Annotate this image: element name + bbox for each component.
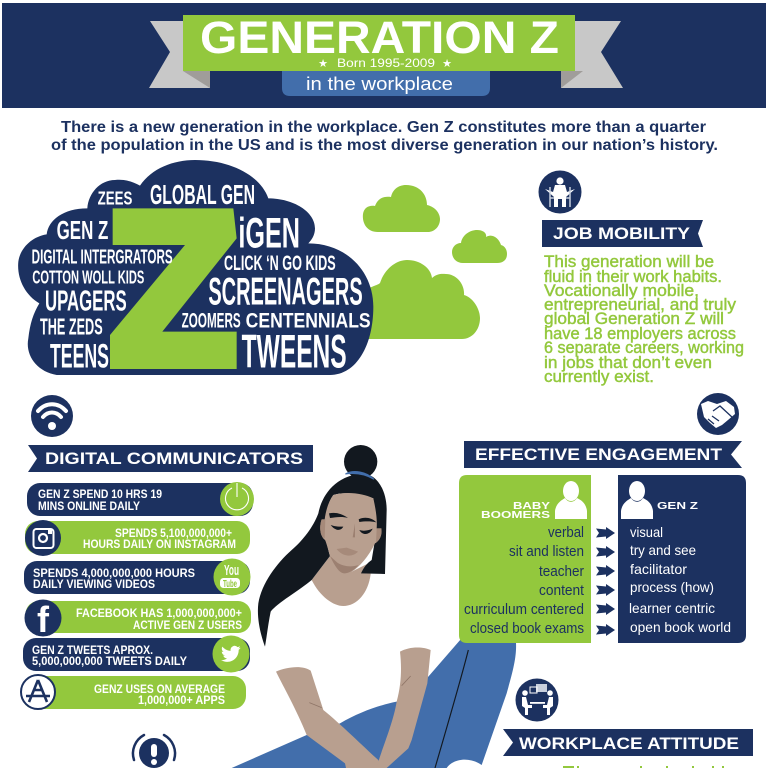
nickname words: GEN Z <box>57 215 108 245</box>
boomers list: closed book exams <box>470 621 584 637</box>
title banner: ★ <box>442 57 452 70</box>
job mobility text: currently exist. <box>544 368 654 386</box>
workplace attitude banner: WORKPLACE ATTITUDE <box>519 734 739 753</box>
boomers heading: BABY <box>513 500 550 512</box>
digital communicators banner <box>28 445 313 472</box>
nickname words: UPAGERS <box>45 286 127 318</box>
icon: youtube: You <box>224 563 239 579</box>
gen z heading: GEN Z <box>657 500 699 512</box>
job mobility banner: JOB MOBILITY <box>553 224 691 243</box>
icon: facebook <box>24 599 62 640</box>
icon: facebook: f <box>37 599 50 640</box>
hair band <box>345 472 374 479</box>
boomers list: verbal <box>548 525 584 541</box>
job mobility text: This generation will be <box>544 253 714 271</box>
job mobility text <box>544 253 744 386</box>
icon: workplace meeting <box>516 678 558 722</box>
subtitle tab: in the workplace <box>306 74 453 94</box>
gen z list <box>629 524 731 635</box>
subtitle tab <box>282 71 490 96</box>
icon: boomer person <box>555 481 587 519</box>
blue chair <box>232 639 516 768</box>
boomers heading: BOOMERS <box>481 509 550 521</box>
title banner: Born 1995-2009 <box>337 58 435 70</box>
icon: handshake <box>697 393 739 435</box>
hair <box>258 473 387 647</box>
stat pill: online hours: GEN Z SPEND 10 HRS 19 <box>38 489 162 501</box>
stat pill: video <box>24 558 250 596</box>
left ribbon tail <box>149 21 210 88</box>
job mobility text: global Generation Z will <box>544 310 724 328</box>
icon: job mobility person <box>538 170 582 214</box>
icon: app store <box>21 675 55 709</box>
job mobility banner <box>542 220 703 247</box>
boomers list: content <box>539 583 584 599</box>
nickname words: SCREENAGERS <box>208 270 363 313</box>
stat pill: apps: GENZ USES ON AVERAGE <box>94 684 225 696</box>
icon: wifi <box>31 395 73 437</box>
stat pill: twitter: 5,000,000,000 TWEETS DAILY <box>32 656 187 668</box>
arms <box>276 647 431 768</box>
stat pill: instagram: HOURS DAILY ON INSTAGRAM <box>83 539 236 551</box>
nickname words: iGEN <box>238 210 300 257</box>
stat pill: facebook <box>24 599 251 640</box>
comparison panel: baby boomers <box>459 475 591 643</box>
nickname words <box>32 179 371 379</box>
face <box>320 493 382 573</box>
stat pill: twitter <box>23 636 250 672</box>
comparison panel: gen z <box>618 475 746 643</box>
icon: power <box>220 482 254 516</box>
nickname words: GLOBAL GEN <box>150 179 255 210</box>
nickname words: CLICK ‘N GO KIDS <box>224 250 336 275</box>
icon: youtube: Tube <box>223 578 237 590</box>
gen z list: facilitator <box>630 561 687 577</box>
stat pill: video: DAILY VIEWING VIDEOS <box>33 579 155 591</box>
title banner: GENERATION Z <box>200 12 559 63</box>
digital communicators banner: DIGITAL COMMUNICATORS <box>45 449 303 468</box>
neck <box>312 556 371 606</box>
stat pill: apps <box>21 675 246 709</box>
effective engagement banner <box>464 441 742 468</box>
hair bun <box>344 445 377 478</box>
effective engagement banner: EFFECTIVE ENGAGEMENT <box>475 445 723 464</box>
nickname words: TWEENS <box>242 326 347 379</box>
job mobility text: in jobs that don’t even <box>544 354 712 372</box>
right ribbon tail <box>561 21 623 88</box>
title banner: ★ <box>318 57 328 70</box>
gen z list: learner centric <box>629 600 715 616</box>
job mobility text: Vocationally mobile, <box>544 282 699 300</box>
stat pill: apps: 1,000,000+ APPS <box>138 695 225 707</box>
big Z <box>110 208 237 369</box>
job mobility text: have 18 employers across <box>544 325 736 343</box>
boomers heading <box>481 500 550 521</box>
stat pill: facebook: ACTIVE GEN Z USERS <box>133 620 242 632</box>
job mobility text: 6 separate careers, working <box>544 339 744 357</box>
icon: alert <box>133 735 175 768</box>
stat pill: online hours <box>27 482 254 516</box>
intro text: of the population in the US and is the most diverse generation in our nation’s history. <box>51 137 718 154</box>
boomers list <box>464 525 584 637</box>
icon: youtube <box>214 558 250 596</box>
job mobility text: entrepreneurial, and truly <box>544 296 737 314</box>
nickname words: TEENS <box>50 338 109 376</box>
gen z list: try and see <box>630 542 696 558</box>
nickname words: CENTENNIALS <box>246 307 371 332</box>
gen z list: open book world <box>630 619 731 635</box>
nickname words: ZEES <box>98 187 132 208</box>
nickname words: COTTON WOLL KIDS <box>32 266 144 287</box>
arrows between columns <box>596 527 615 636</box>
workplace attitude banner <box>503 729 753 756</box>
icon: instagram <box>25 520 61 556</box>
stat pill: instagram <box>25 520 250 556</box>
nickname words: ZOOMERS <box>182 308 241 333</box>
intro text: There is a new generation in the workplace. Gen Z constitutes more than a quarter <box>61 119 706 136</box>
nickname words: THE ZEDS <box>40 313 103 339</box>
gen z list: process (how) <box>630 579 714 595</box>
stat pill: instagram: SPENDS 5,100,000,000+ <box>115 528 232 540</box>
illustration: woman with ponytail <box>232 445 516 768</box>
gen z list: visual <box>630 524 663 540</box>
word cloud of Gen Z nicknames <box>18 160 373 379</box>
stat pill: video: SPENDS 4,000,000,000 HOURS <box>33 568 195 580</box>
header band <box>2 3 766 108</box>
stat pill: facebook: FACEBOOK HAS 1,000,000,000+ <box>76 608 242 620</box>
green decorative clouds <box>363 185 507 339</box>
boomers list: curriculum centered <box>464 602 584 618</box>
boomers list: sit and listen <box>509 544 584 560</box>
stat pill: online hours: MINS ONLINE DAILY <box>38 501 140 513</box>
icon: twitter <box>212 636 250 672</box>
job mobility text: fluid in their work habits. <box>544 268 722 286</box>
intro text <box>51 119 718 154</box>
icon: gen z person <box>621 481 653 519</box>
boomers list: teacher <box>539 564 584 580</box>
clipped next text line at page edge <box>563 766 724 768</box>
stat pill: twitter: GEN Z TWEETS APROX. <box>32 645 153 657</box>
nickname words: DIGITAL INTERGRATORS <box>32 246 173 269</box>
